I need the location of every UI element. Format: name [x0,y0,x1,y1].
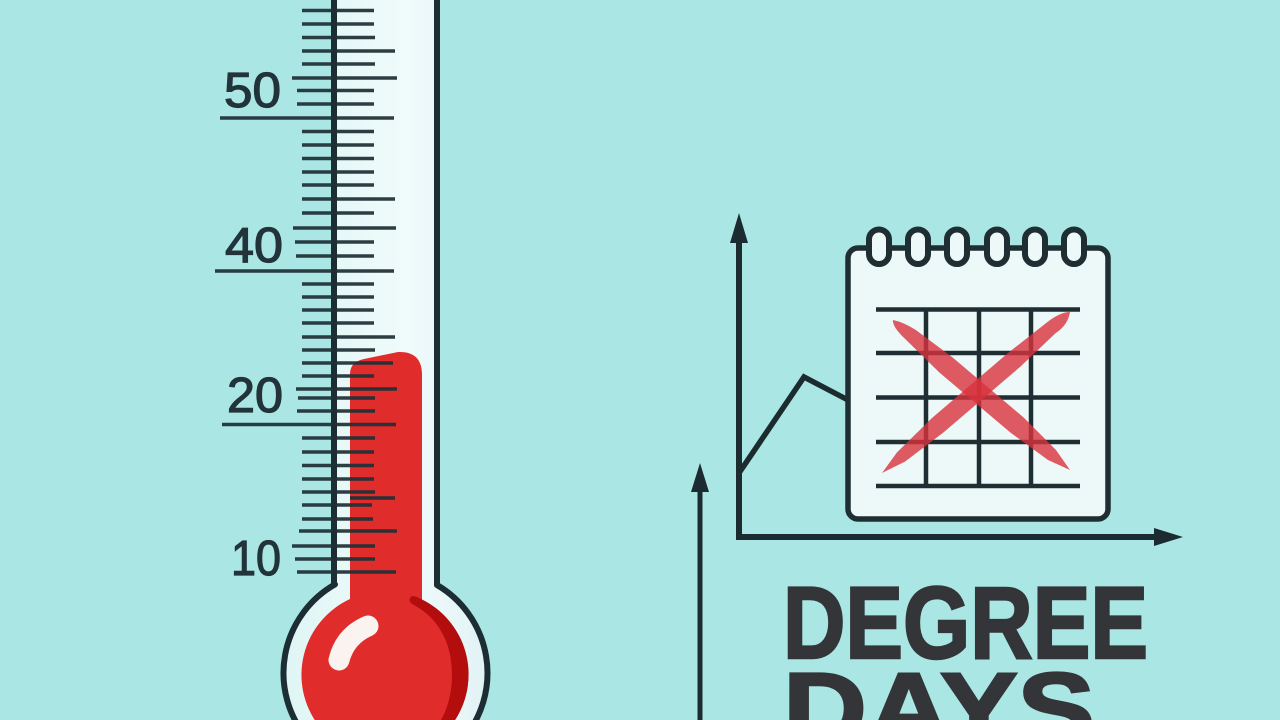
spiral binding rings [869,230,1084,264]
calendar icon [848,230,1108,519]
calendar page [848,248,1108,519]
calendar grid [876,309,1080,486]
title line: DEGREE: DEGREE [783,566,1148,680]
title [783,566,1148,720]
scale label 50: 50 [224,64,281,118]
chart axes [730,213,1183,546]
bulb highlight [339,626,368,660]
scale label 20: 20 [227,369,283,423]
red mercury column and bulb [301,352,468,720]
dark red bulb shading [410,596,469,720]
scale label 10: 10 [231,532,281,586]
second vertical arrow [691,463,709,720]
scale ticks [215,10,397,572]
thermometer [215,0,487,720]
chart line [739,377,848,473]
thermometer glass tube and bulb [283,0,487,720]
scale label 40: 40 [225,219,283,273]
red cross mark [882,312,1070,473]
